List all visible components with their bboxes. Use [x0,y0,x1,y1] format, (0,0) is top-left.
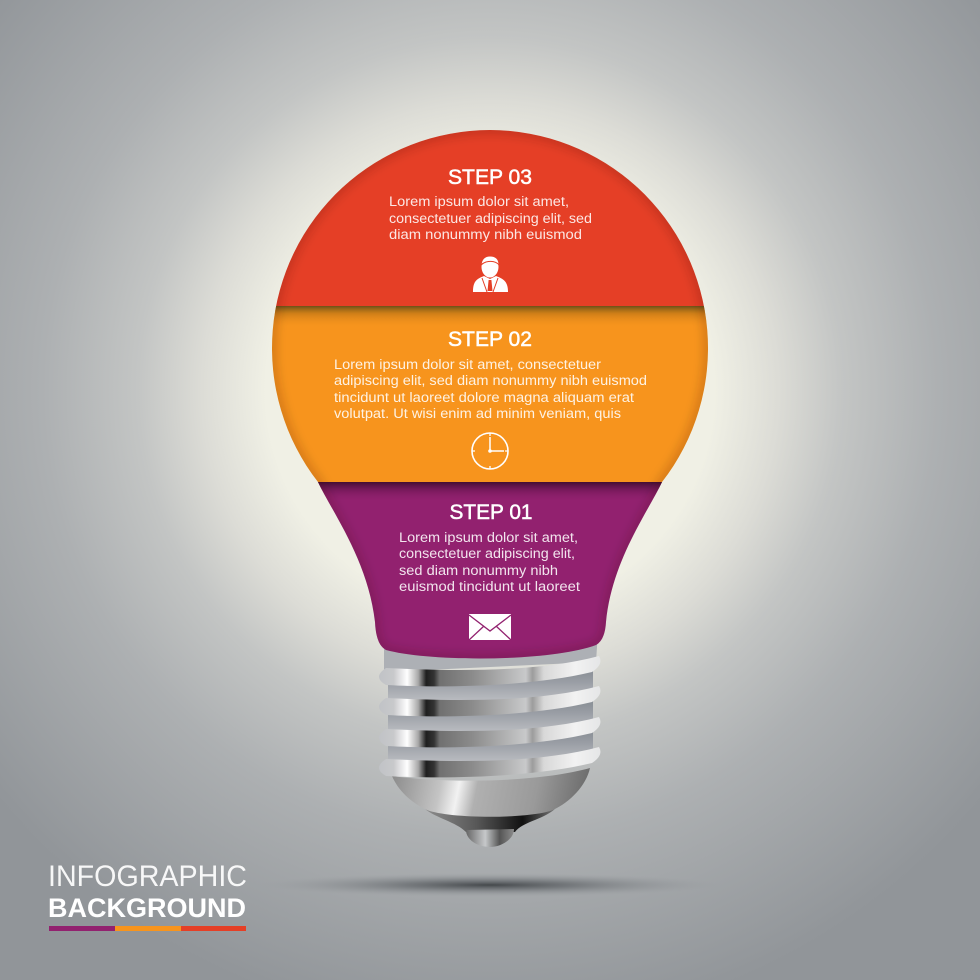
panel: step 03 red [276,130,704,306]
icon: businessman [473,256,508,292]
contact cap [425,809,555,832]
heading: step 03: STEP 03 [448,166,532,189]
title: infographic: INFOGRAPHIC [48,860,247,893]
text: step 02 body: adipiscing elit, sed diam nonummy nibh euismod [334,373,647,388]
text: step 03 body [389,194,592,242]
text: step 03 body: diam nonummy nibh euismod [389,227,582,242]
text: step 03 body: Lorem ipsum dolor sit amet, [389,194,569,209]
screw base [379,632,600,847]
title: background: BACKGROUND [48,893,246,923]
text: step 01 body: sed diam nonummy nibh [399,563,558,578]
tri-colour bar [49,926,246,931]
ground shadow [255,873,725,897]
cone [392,768,590,817]
icon: clock [472,433,508,469]
text: step 03 body: consectetuer adipiscing elit, sed [389,211,592,226]
text: step 01 body: Lorem ipsum dolor sit amet, [399,530,578,545]
text: step 02 body: volutpat. Ut wisi enim ad minim veniam, quis [334,406,621,421]
bulb glass segments [260,120,720,672]
text: step 01 body [399,530,580,594]
thread 2 [379,686,600,716]
thread 4 [379,747,600,777]
text: step 02 body: tincidunt ut laoreet dolore magna aliquam erat [334,390,634,405]
contact tip [466,829,514,847]
text: step 02 body: Lorem ipsum dolor sit amet, consectetuer [334,357,602,372]
icon: envelope [469,614,511,640]
bulb inner edge shading [272,130,708,658]
heading: step 01: STEP 01 [450,501,532,524]
heading: step 02: STEP 02 [448,328,532,351]
text: step 01 body: euismod tincidunt ut laoreet [399,579,580,594]
panel: step 02 orange [260,306,720,483]
thread 3 [379,717,600,747]
panel: step 01 purple [318,482,662,658]
thread 1 [379,656,600,686]
text: step 01 body: consectetuer adipiscing elit, [399,546,575,561]
title block [48,860,247,931]
light bulb [260,120,720,847]
text: step 02 body [334,357,647,421]
